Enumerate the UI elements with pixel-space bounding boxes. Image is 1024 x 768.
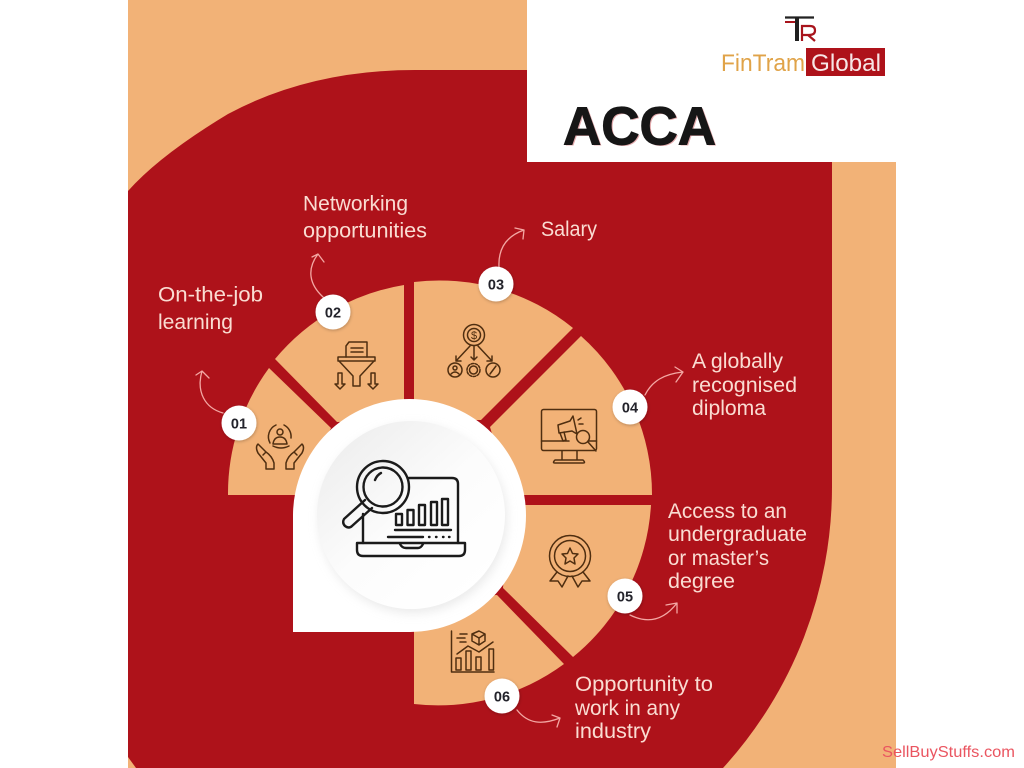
label 05: Access to an undergraduate or master's degree: [668, 500, 807, 593]
logo icon: TR mark: [785, 17, 815, 41]
arrow 03: [499, 228, 524, 267]
icon: magnifier over laptop chart: [343, 461, 465, 556]
arrow 05: [630, 603, 677, 620]
badge 06: [484, 678, 520, 714]
title: ACCA: ACCA: [564, 98, 718, 158]
wedge 01: [228, 368, 331, 495]
wedge 04: [490, 336, 652, 495]
badge 03: [478, 266, 514, 302]
wedge 02: [275, 285, 404, 422]
label 05: Access to an undergraduate or master's degree: Access to an: [668, 500, 787, 523]
badge 02: 02: [325, 306, 341, 322]
label 05: Access to an undergraduate or master's degree: undergraduate: [668, 523, 807, 546]
icon 06: bars with package: [452, 631, 494, 672]
logo: FinTram Global: [721, 17, 885, 77]
label 01: On-the-job learning: learning: [158, 311, 233, 334]
title: ACCA: ACCA: [563, 96, 716, 156]
icon 05: award badge: [550, 536, 590, 587]
icon 03: dollar hierarchy: [448, 324, 500, 377]
watermark: SellBuyStuffs.com: [882, 744, 1015, 761]
wedge 06: [414, 595, 564, 705]
label 06: Opportunity to work in any industry: Opportunity to: [575, 673, 713, 696]
arrow 06: [517, 710, 560, 727]
label 02: Networking opportunities: [303, 192, 427, 242]
icon 03: dollar hierarchy: $: [471, 330, 477, 342]
label 01: On-the-job learning: On-the-job: [158, 284, 263, 306]
badge 04: [612, 390, 648, 424]
center pin badge: [293, 399, 526, 632]
label 02: Networking opportunities: opportunities: [303, 220, 427, 242]
icon 02: funnel and document: [335, 342, 378, 389]
wedge 03: [414, 280, 573, 420]
label 06: Opportunity to work in any industry: industry: [575, 720, 652, 743]
label 04: A globally recognised diploma: [692, 350, 797, 420]
label 05: Access to an undergraduate or master's degree: or master’s: [668, 547, 769, 570]
label 06: Opportunity to work in any industry: [574, 673, 713, 743]
label 06: Opportunity to work in any industry: work in any: [574, 697, 680, 720]
label 04: A globally recognised diploma: diploma: [692, 397, 766, 420]
arrow 04: [645, 367, 683, 395]
badge 03: 03: [488, 278, 504, 294]
badge 06: 06: [494, 690, 510, 706]
badge 05: [608, 578, 642, 614]
arrow 02: [311, 254, 324, 297]
label 01: On-the-job learning: [158, 284, 263, 334]
badge 05: 05: [617, 590, 633, 606]
badge 04: 04: [622, 400, 638, 416]
background panel: peach: [128, 0, 896, 768]
badge 02: [316, 294, 350, 330]
label 02: Networking opportunities: Networking: [303, 192, 408, 216]
header panel: white box: [527, 0, 896, 162]
icon 04: monitor with megaphone: [542, 410, 596, 463]
label 04: A globally recognised diploma: A globally: [692, 350, 783, 373]
logo badge: Global: Global: [811, 50, 881, 77]
label 04: A globally recognised diploma: recognised: [692, 374, 797, 397]
label 05: Access to an undergraduate or master's degree: degree: [668, 570, 735, 593]
arrow 01: [196, 371, 223, 413]
wedge 05: [503, 505, 651, 657]
icon 01: hands and person: [256, 425, 304, 469]
badge 01: 01: [231, 416, 247, 432]
label 03: Salary: Salary: [541, 218, 597, 241]
background shape: red circle: [128, 70, 832, 768]
logo text: FinTram: FinTram: [721, 50, 805, 77]
badge 01: [222, 406, 256, 440]
